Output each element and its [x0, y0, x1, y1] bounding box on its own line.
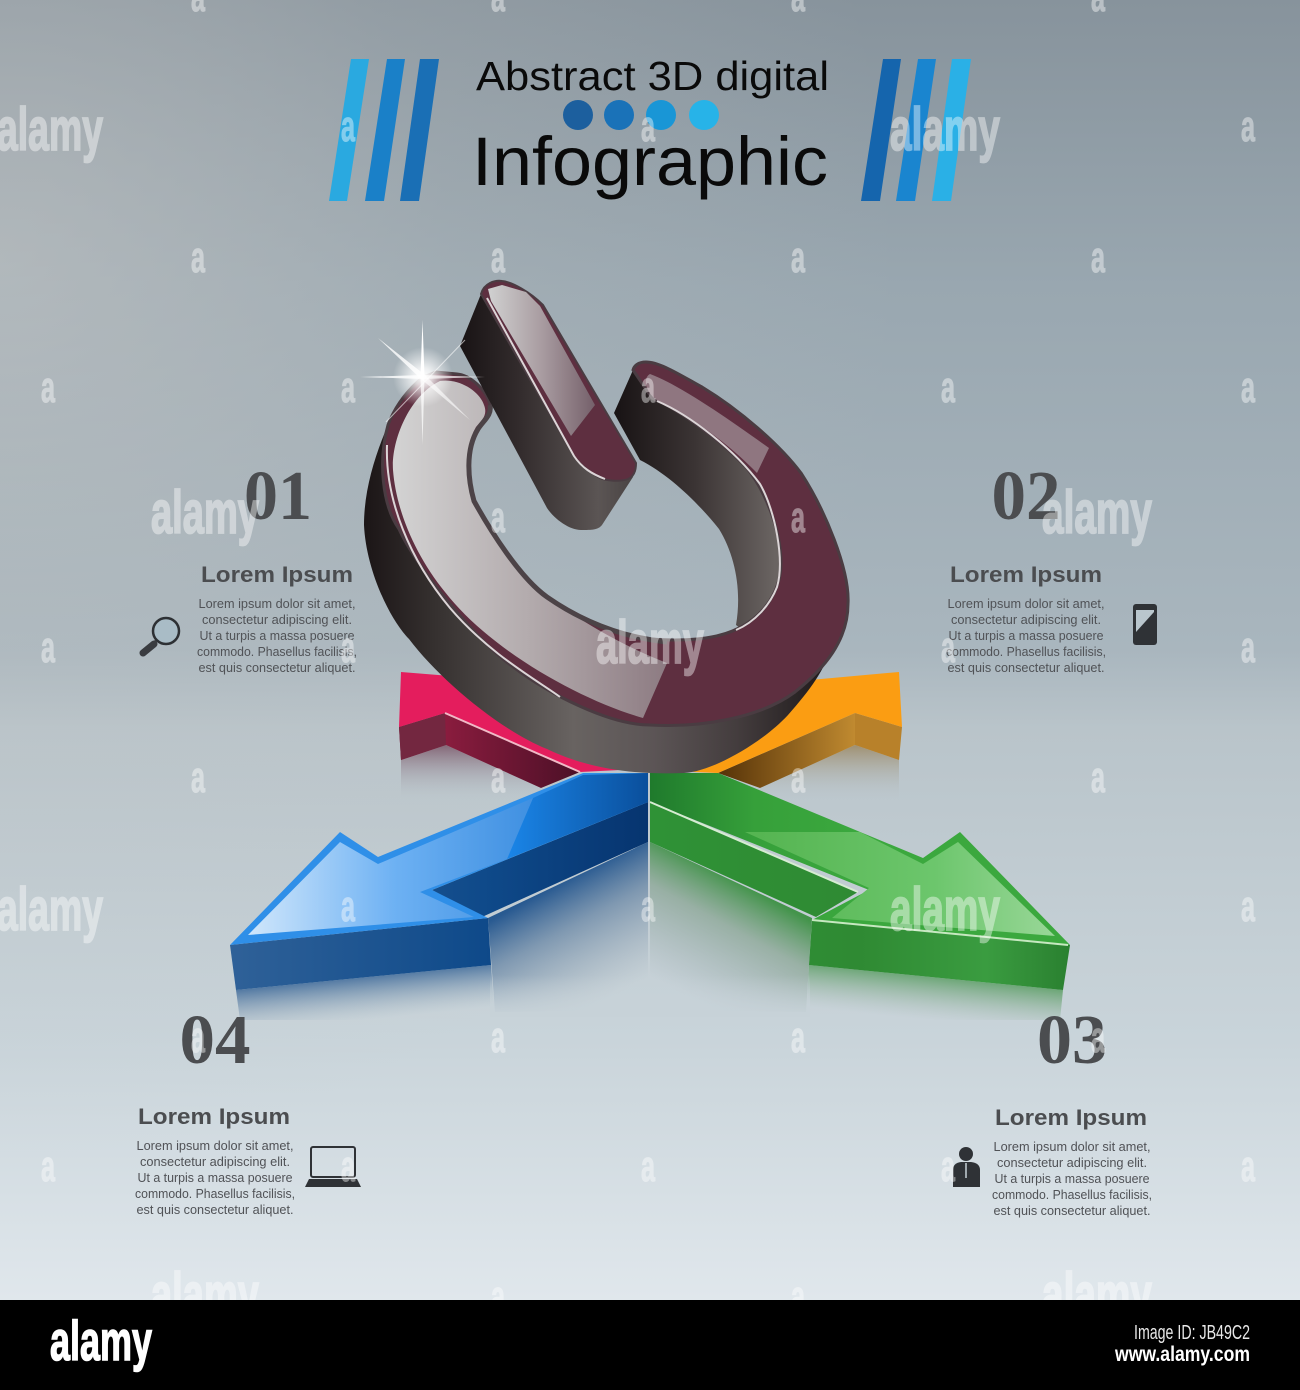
text 01: commodo. Phasellus facilisis,	[197, 645, 357, 659]
watermark letters: a	[41, 1142, 55, 1191]
text 02: Lorem ipsum dolor sit amet,	[948, 597, 1104, 611]
watermark words: alamy	[890, 876, 1000, 943]
watermark letters: a	[791, 233, 805, 282]
watermark letters: a	[491, 493, 505, 542]
watermark words: alamy	[1042, 1261, 1152, 1328]
heading 03: Lorem Ipsum	[995, 1105, 1147, 1130]
watermark letters: a	[941, 363, 955, 412]
number 02: 02	[992, 458, 1060, 535]
watermark letters: a	[191, 1013, 205, 1062]
ring extruded side	[364, 425, 832, 773]
watermark letters: a	[341, 882, 355, 931]
ring inner rim	[469, 405, 667, 642]
watermark words: alamy	[596, 609, 704, 676]
watermark letters: a	[1241, 882, 1255, 931]
watermark letters: a	[191, 753, 205, 802]
power icon 3D	[364, 281, 848, 773]
watermark letters: a	[41, 363, 55, 412]
step 04	[135, 1002, 295, 1217]
ring gloss right	[646, 374, 769, 473]
watermark letters: a	[1241, 623, 1255, 672]
arrow: green front right	[650, 773, 1070, 1020]
heading 04: Lorem Ipsum	[138, 1104, 290, 1129]
text 04: Ut a turpis a massa posuere	[138, 1171, 293, 1185]
text 01: Ut a turpis a massa posuere	[200, 629, 355, 643]
text 04: est quis consectetur aliquet.	[136, 1203, 294, 1217]
watermark letters: a	[341, 1142, 355, 1191]
icon: phone	[1133, 604, 1157, 645]
title dots	[563, 100, 719, 130]
text 04	[135, 1139, 295, 1217]
text 03: consectetur adipiscing elit.	[997, 1156, 1147, 1170]
icon: magnifier	[143, 618, 179, 653]
watermark letters: a	[341, 102, 355, 151]
text 04: commodo. Phasellus facilisis,	[135, 1187, 295, 1201]
text 01: est quis consectetur aliquet.	[198, 661, 356, 675]
watermark letters: a	[341, 363, 355, 412]
title block	[329, 53, 971, 201]
watermark letters: a	[491, 233, 505, 282]
text 03: Lorem ipsum dolor sit amet,	[994, 1140, 1150, 1154]
footer bar	[0, 1300, 1300, 1390]
number 03: 03	[1037, 1002, 1107, 1079]
pin top face	[481, 281, 636, 481]
watermark letters: a	[941, 1142, 955, 1191]
text 02	[946, 597, 1106, 675]
ring gloss left	[393, 381, 667, 718]
footer url: www.alamy.com	[1114, 1343, 1250, 1366]
text 04: consectetur adipiscing elit.	[140, 1155, 290, 1169]
arrow: blue front left	[230, 773, 648, 1020]
icon: person	[953, 1147, 980, 1187]
watermark words: alamy	[1042, 479, 1152, 546]
text 02: consectetur adipiscing elit.	[951, 613, 1101, 627]
text 02: Ut a turpis a massa posuere	[948, 629, 1104, 643]
watermark letters: a	[1241, 102, 1255, 151]
pin side	[460, 294, 633, 530]
watermark letters: a	[341, 623, 355, 672]
title slashes left	[329, 59, 439, 201]
watermark letters: a	[641, 102, 655, 151]
watermark letters: a	[941, 623, 955, 672]
watermark letters: a	[791, 493, 805, 542]
watermark letters: a	[641, 363, 655, 412]
title line two: Infographic	[472, 123, 828, 200]
ring inner wall	[614, 370, 785, 632]
pin gloss	[488, 285, 595, 436]
text 03: est quis consectetur aliquet.	[994, 1204, 1150, 1218]
text 03: Ut a turpis a massa posuere	[994, 1172, 1150, 1186]
text 04: Lorem ipsum dolor sit amet,	[136, 1139, 294, 1153]
step 02	[946, 458, 1106, 675]
watermark words	[0, 96, 1152, 1328]
watermark letters: a	[1241, 1142, 1255, 1191]
watermark letters: a	[1091, 233, 1105, 282]
floor reflection fade	[490, 975, 810, 1017]
number 01: 01	[244, 458, 312, 535]
watermark words: alamy	[151, 1261, 259, 1328]
text 01	[197, 597, 357, 675]
watermark letters: a	[641, 882, 655, 931]
heading 01: Lorem Ipsum	[201, 562, 353, 587]
watermark letters: a	[1091, 753, 1105, 802]
footer image id: Image ID: JB49C2	[1134, 1322, 1250, 1344]
title line one: Abstract 3D digital	[476, 53, 829, 99]
text 01: consectetur adipiscing elit.	[202, 613, 352, 627]
icon: laptop	[305, 1147, 361, 1187]
watermark letters: a	[1091, 1013, 1105, 1062]
arrow: red back left	[399, 672, 620, 800]
step 03	[992, 1002, 1152, 1218]
watermark letters: a	[491, 1272, 505, 1321]
text 02: est quis consectetur aliquet.	[948, 661, 1104, 675]
watermark words: alamy	[0, 96, 103, 163]
watermark letters: a	[791, 1272, 805, 1321]
watermark words: alamy	[890, 96, 1000, 163]
arrow: orange back right	[693, 672, 902, 800]
watermark letters: a	[41, 623, 55, 672]
sparkle	[360, 320, 485, 445]
watermark words: alamy	[0, 876, 103, 943]
watermark letters: a	[791, 1013, 805, 1062]
watermark letters: a	[1241, 363, 1255, 412]
watermark letters: a	[191, 233, 205, 282]
watermark letters: a	[641, 1142, 655, 1191]
watermark letters: a	[791, 753, 805, 802]
footer logo: alamy	[50, 1309, 152, 1372]
number 04: 04	[180, 1002, 250, 1079]
text 01: Lorem ipsum dolor sit amet,	[198, 597, 356, 611]
ring highlight lines	[387, 401, 780, 697]
watermark words: alamy	[151, 479, 259, 546]
pin highlight	[487, 298, 605, 479]
text 02: commodo. Phasellus facilisis,	[946, 645, 1106, 659]
ring top face	[383, 362, 848, 726]
text 03: commodo. Phasellus facilisis,	[992, 1188, 1152, 1202]
text 03	[992, 1140, 1152, 1218]
step 01	[197, 458, 357, 675]
heading 02: Lorem Ipsum	[950, 562, 1102, 587]
watermark letters: a	[491, 1013, 505, 1062]
watermark letters: a	[491, 753, 505, 802]
title slashes right	[861, 59, 971, 201]
